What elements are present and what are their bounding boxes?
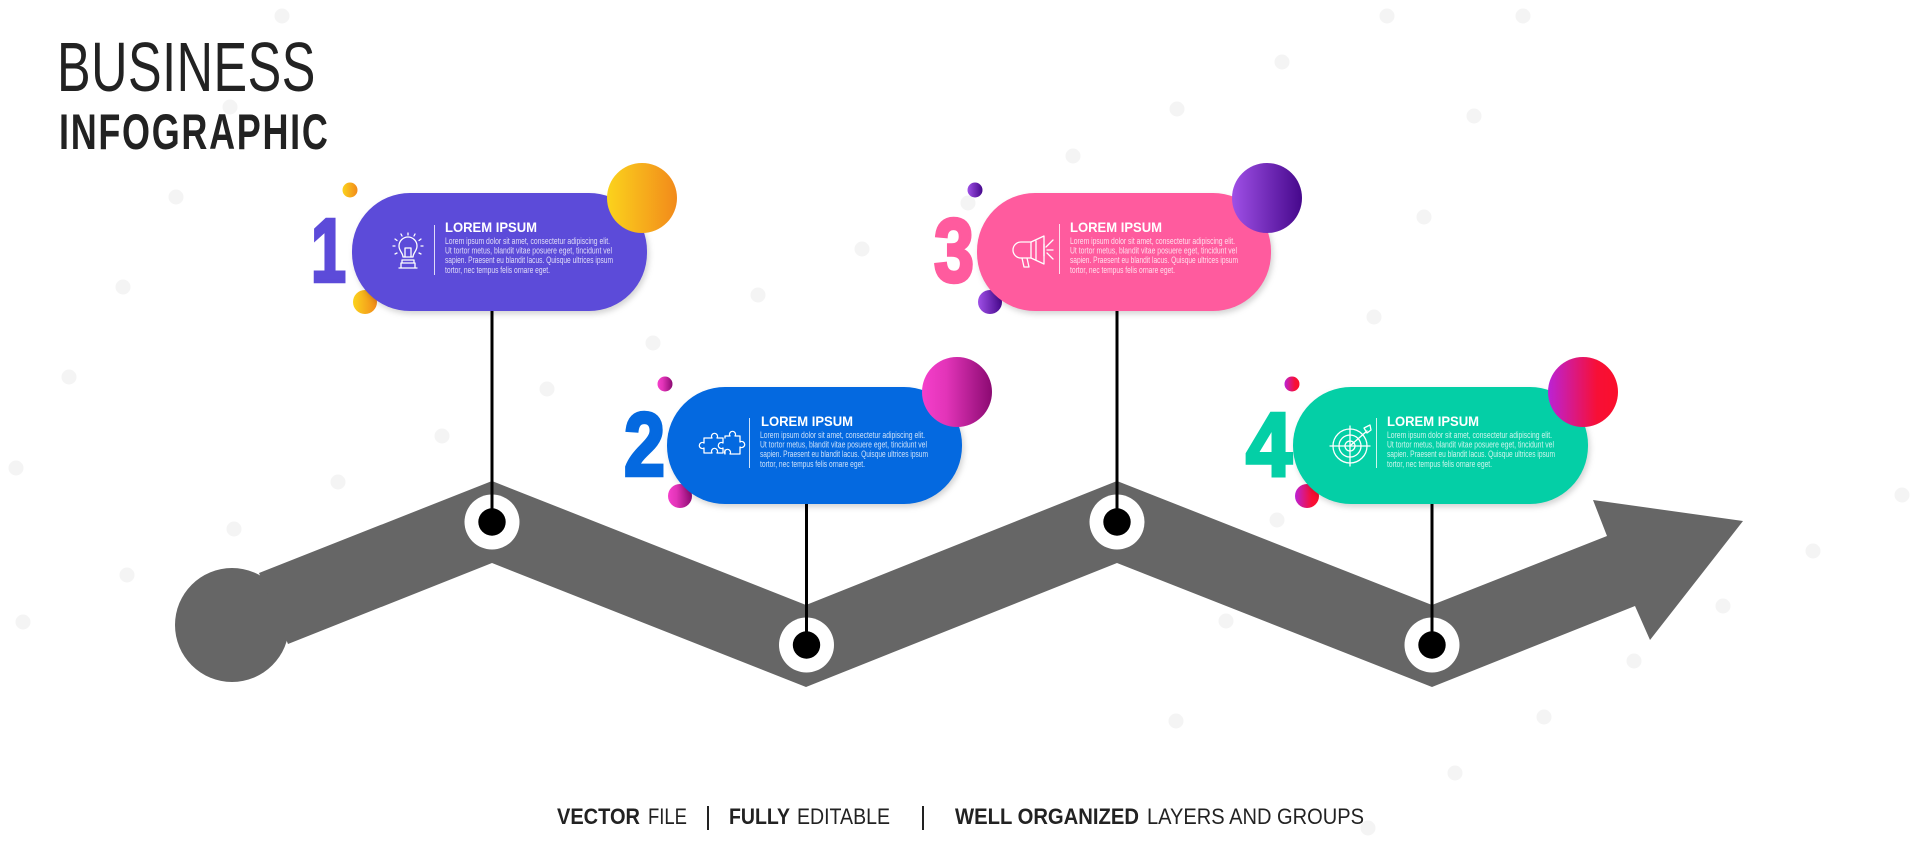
lower dot [1295, 484, 1319, 508]
heading: LOREM IPSUM [445, 219, 537, 235]
heading: LOREM IPSUM [761, 413, 853, 429]
connector 2 [779, 500, 834, 672]
icon: target [1330, 425, 1371, 466]
body text: Lorem ipsum dolor sit amet, consectetur adipiscing elit. [1070, 236, 1235, 246]
body text: sapien. Praesent eu blandit lacus. Quisque ultrices ipsum [1387, 449, 1555, 459]
footer caption: FILE [648, 804, 687, 829]
body text [1070, 236, 1238, 275]
body text: Ut tortor metus, blandit vitae posuere eget, tincidunt vel [1070, 246, 1237, 256]
number 4: 4 [1246, 396, 1292, 496]
body text: sapien. Praesent eu blandit lacus. Quisque ultrices ipsum [760, 449, 928, 459]
panel: step 2 [624, 357, 992, 508]
footer caption: WELL ORGANIZED [955, 804, 1139, 829]
pill [667, 387, 962, 504]
icon: light bulb [393, 233, 423, 268]
body text: tortor, nec tempus felis ornare eget. [1070, 265, 1175, 275]
pill [977, 193, 1271, 311]
big circle [1232, 163, 1302, 233]
title [57, 28, 330, 160]
divider [1059, 224, 1060, 274]
footer caption [557, 804, 1364, 830]
number 1: 1 [311, 202, 346, 302]
body text: tortor, nec tempus felis ornare eget. [445, 265, 550, 275]
divider [749, 418, 750, 468]
icon: puzzle [699, 431, 745, 454]
body text: tortor, nec tempus felis ornare eget. [1387, 459, 1492, 469]
pill [1293, 387, 1588, 504]
body text: tortor, nec tempus felis ornare eget. [760, 459, 865, 469]
connector 4 [1404, 500, 1460, 672]
small dot [342, 182, 358, 198]
title: BUSINESS [57, 28, 316, 106]
footer caption: FULLY [729, 804, 790, 829]
number 3: 3 [934, 202, 974, 302]
small dot [658, 376, 672, 392]
pill [352, 193, 647, 311]
heading: LOREM IPSUM [1070, 219, 1162, 235]
footer caption: VECTOR [557, 804, 640, 829]
divider [434, 225, 435, 275]
body text: Lorem ipsum dolor sit amet, consectetur adipiscing elit. [445, 236, 610, 246]
heading: LOREM IPSUM [1387, 413, 1479, 429]
lower dot [668, 484, 692, 508]
big circle [922, 357, 992, 427]
lower dot [978, 290, 1002, 314]
zigzag arrow [175, 481, 1743, 687]
big circle [607, 163, 677, 233]
body text [760, 430, 928, 469]
panel: step 3 [934, 163, 1302, 314]
body text: sapien. Praesent eu blandit lacus. Quisque ultrices ipsum [445, 255, 613, 265]
title: INFOGRAPHIC [59, 105, 330, 160]
body text: sapien. Praesent eu blandit lacus. Quisque ultrices ipsum [1070, 255, 1238, 265]
lower dot [353, 290, 377, 314]
body text [1387, 430, 1555, 469]
small dot [1284, 376, 1300, 392]
footer caption: EDITABLE [797, 804, 890, 829]
connector 1 [464, 305, 520, 550]
body text: Lorem ipsum dolor sit amet, consectetur adipiscing elit. [760, 430, 925, 440]
big circle [1548, 357, 1618, 427]
body text: Lorem ipsum dolor sit amet, consectetur adipiscing elit. [1387, 430, 1552, 440]
panel: step 1 [311, 163, 677, 314]
number 2: 2 [624, 396, 665, 496]
divider [1376, 418, 1377, 468]
panel: step 4 [1246, 357, 1618, 508]
small dot [968, 182, 982, 198]
body text: Ut tortor metus, blandit vitae posuere eget, tincidunt vel [445, 246, 612, 256]
icon: megaphone [1013, 236, 1053, 267]
body text [445, 236, 613, 275]
connector 3 [1090, 305, 1144, 550]
body text: Ut tortor metus, blandit vitae posuere eget, tincidunt vel [1387, 440, 1554, 450]
body text: Ut tortor metus, blandit vitae posuere eget, tincidunt vel [760, 440, 927, 450]
footer caption: LAYERS AND GROUPS [1147, 804, 1364, 829]
